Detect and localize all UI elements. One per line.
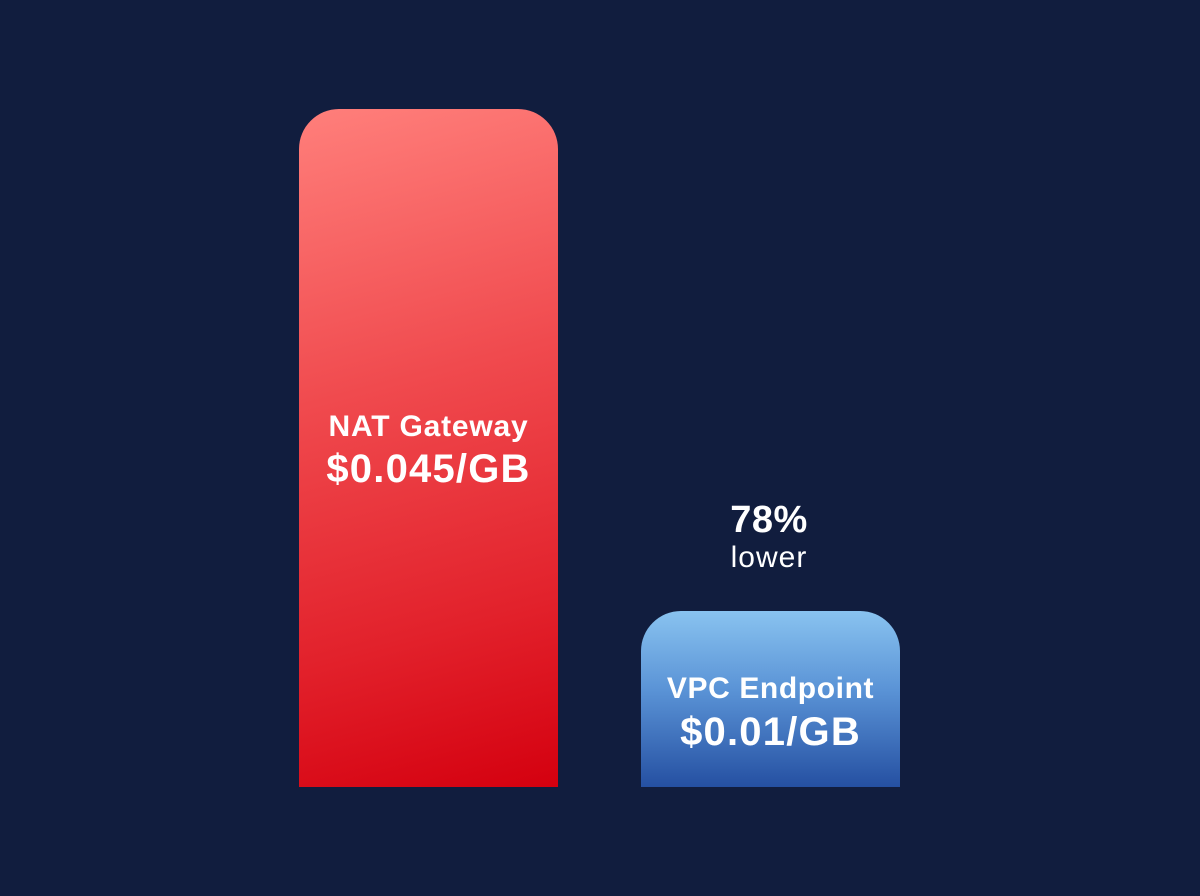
- value: $0.01/GB: $0.01/GB: [680, 710, 861, 754]
- percentage: 78%: [730, 499, 808, 541]
- bar: VPC Endpoint: [641, 611, 900, 787]
- bar: NAT Gateway: [299, 109, 558, 787]
- label: NAT Gateway: NAT Gateway: [329, 410, 528, 443]
- value: $0.045/GB: $0.045/GB: [326, 447, 531, 491]
- lower text: lower: [731, 541, 807, 574]
- label: VPC Endpoint: VPC Endpoint: [667, 672, 874, 705]
- callout: 78% lower: [730, 499, 808, 574]
